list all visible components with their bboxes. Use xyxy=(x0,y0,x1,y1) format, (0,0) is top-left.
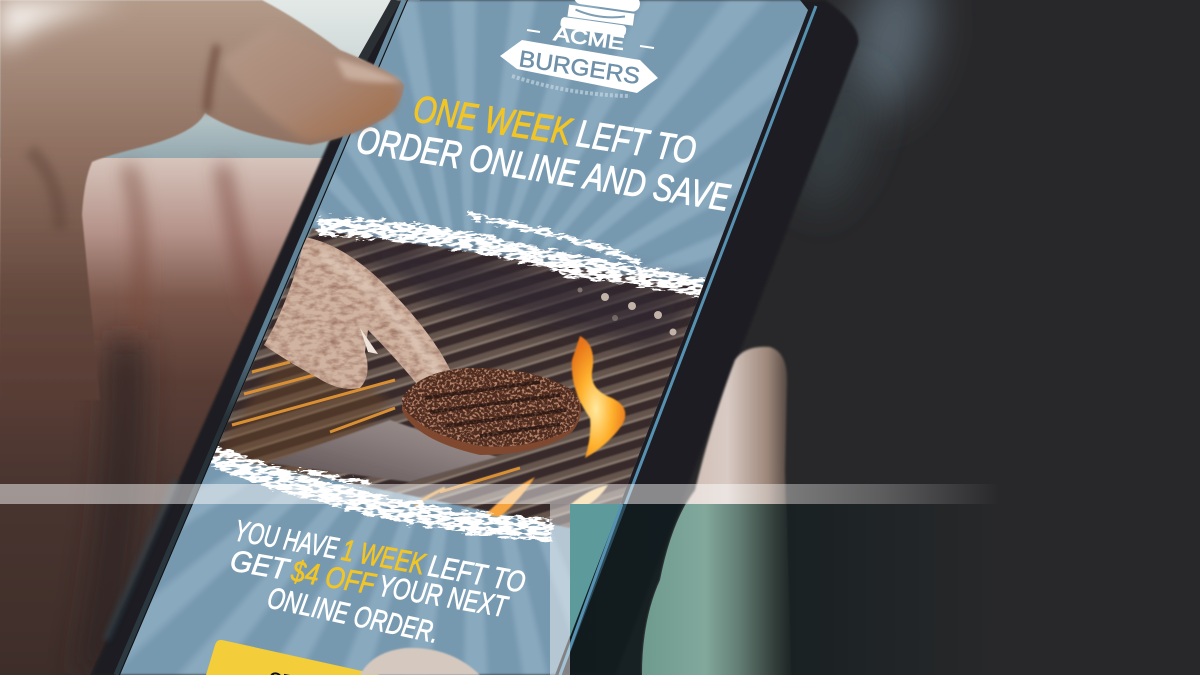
grill xyxy=(212,228,708,528)
metal plate xyxy=(267,420,497,482)
body copy line 3: ONLINE ORDER. xyxy=(265,582,442,650)
body copy line 1: YOU HAVE xyxy=(232,514,342,566)
bottom thumb over button xyxy=(360,648,480,675)
logo badge BURGERS: BURGERS xyxy=(517,45,642,89)
body copy line 2: YOUR NEXT xyxy=(376,570,511,624)
teal tinted finger xyxy=(640,504,795,675)
phone body xyxy=(92,0,858,675)
beef patty xyxy=(402,368,581,455)
lower flames xyxy=(415,477,608,517)
glove hand xyxy=(264,237,450,389)
translucent horizontal band xyxy=(0,484,1000,504)
headline line 1 xyxy=(414,96,696,163)
body copy line 2: GET xyxy=(228,544,293,587)
grease dots xyxy=(578,288,676,336)
rear fingers behind phone xyxy=(0,158,335,675)
call to action button xyxy=(206,640,380,675)
headline line 1: LEFT TO xyxy=(574,113,699,173)
grill hot bars xyxy=(232,362,520,492)
phone bezel highlights xyxy=(106,0,816,675)
headline line 2: ORDER ONLINE AND SAVE xyxy=(354,119,733,220)
body copy line 1: LEFT TO xyxy=(426,550,528,600)
icon: burger xyxy=(560,0,641,38)
dark tint lower right overlay xyxy=(570,504,1000,675)
logo word ACME: ACME xyxy=(552,23,626,55)
white brush edge bottom xyxy=(214,456,552,530)
translucent vertical band xyxy=(550,504,570,675)
flame xyxy=(572,336,625,458)
phone screen with sun rays xyxy=(120,0,808,675)
teal tinted screen corner xyxy=(570,504,621,637)
white brush edge top xyxy=(318,216,705,288)
screen content clipped to phone xyxy=(206,0,733,675)
burger grill photo xyxy=(212,216,708,530)
phone edge highlight lower xyxy=(560,504,622,675)
body copy line 1: 1 WEEK xyxy=(339,534,429,582)
body copy line 2: $4 OFF xyxy=(288,555,379,602)
front thumb over phone xyxy=(0,0,404,400)
headline line 1: ONE WEEK xyxy=(411,88,575,154)
right finger xyxy=(642,347,790,675)
body copy line 2 xyxy=(231,551,510,616)
logo: Acme Burgers xyxy=(500,0,658,96)
body copy line 1 xyxy=(238,520,526,592)
logo badge BURGERS xyxy=(500,40,658,93)
